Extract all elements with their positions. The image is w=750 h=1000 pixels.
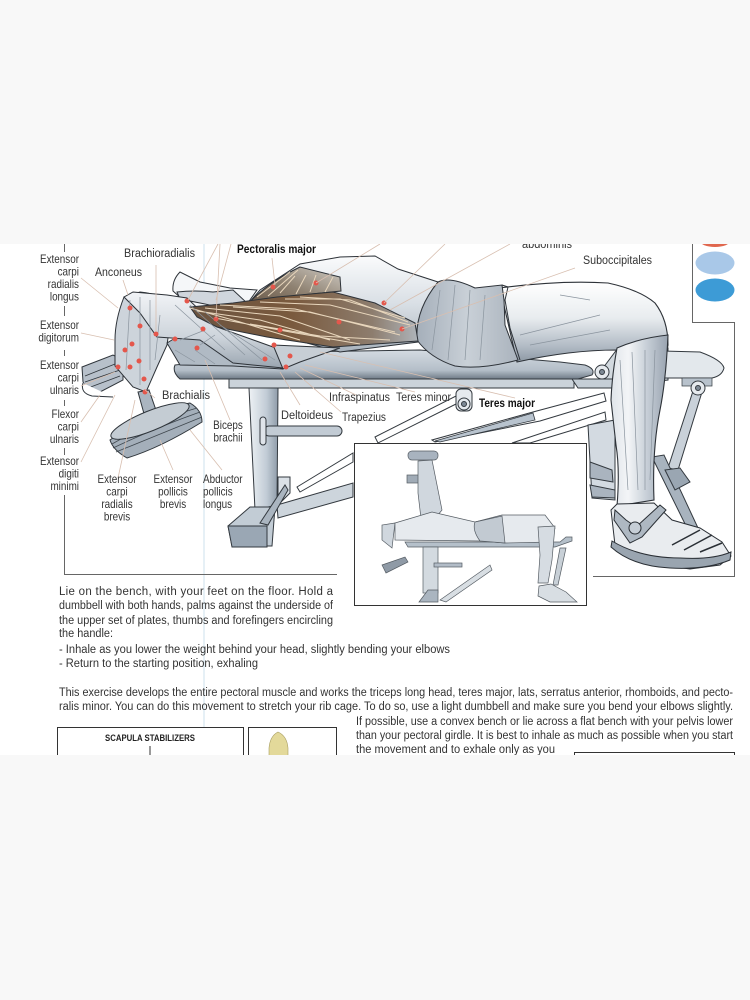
top page margin overlay (0, 0, 750, 244)
lower arm (167, 332, 283, 369)
label: extensor digitorum: digitorum (38, 332, 79, 345)
description text: than your pectoral girdle. It is best to inhale as much as possible when you start (356, 730, 734, 742)
muscle labels left column (38, 253, 79, 493)
label: abductor pollicis longus: Abductor (203, 473, 243, 486)
muscle labels around the figure (95, 239, 652, 524)
shoulder and armpit (273, 345, 340, 369)
bench and frame (174, 348, 724, 547)
calf (611, 335, 668, 506)
label: teres major: Teres major (479, 398, 535, 410)
upper plate lip (82, 383, 113, 397)
instructions text (59, 586, 450, 670)
bench under rail (229, 379, 574, 388)
pale blue fold line (203, 244, 205, 740)
label: extensor digiti minimi: digiti (59, 468, 79, 481)
description text: If possible, use a convex bench or lie across a flat bench with your pelvis lower (356, 716, 733, 728)
label: extensor carpi radialis longus: carpi (58, 266, 79, 279)
inset panel: stretched arms view (354, 444, 586, 606)
instructions text: Lie on the bench, with your feet on the floor. Hold a (59, 586, 334, 598)
muscle fibre lines (190, 270, 410, 344)
label: extensor carpi radialis brevis: brevis (104, 511, 130, 524)
pectoralis, body and arms (115, 256, 520, 392)
right foot bar (278, 477, 290, 505)
label: abductor pollicis longus: pollicis (203, 486, 233, 499)
white scanned page band (0, 244, 750, 755)
muscle hatching on arms and legs (126, 285, 655, 490)
label: extensor carpi radialis brevis: Extensor (97, 473, 137, 486)
inset body (395, 512, 577, 602)
illustration frame lines (64, 244, 734, 576)
handle (138, 390, 158, 421)
label: deltoideus: Deltoideus (281, 410, 333, 422)
label: infraspinatus: Infraspinatus (329, 392, 390, 404)
instructions text: the upper set of plates, thumbs and forefingers encircling (59, 615, 333, 627)
seat lever (260, 417, 342, 445)
thigh (500, 282, 668, 362)
label: extensor carpi radialis longus: Extensor (40, 253, 79, 266)
label: trapezius: Trapezius (342, 412, 386, 424)
anatomical leader lines (81, 244, 575, 478)
panel: scapula stabilizers: SCAPULA STABILIZERS (105, 733, 195, 743)
description text: ralis minor. You can do this movement to stretch your rib cage. To do so, use a light dumbbell and make sure you bend your elbows slightly. (59, 701, 733, 713)
panel: lower right box (574, 752, 734, 772)
panel: scapula stabilizers (58, 728, 244, 768)
torso and chest (240, 256, 438, 352)
label: extensor carpi ulnaris: ulnaris (50, 384, 79, 397)
inset bench (405, 537, 572, 602)
hanging forearms (115, 292, 172, 392)
lower plates (107, 396, 202, 458)
front sandal (611, 503, 731, 569)
label: extensor digiti minimi: minimi (50, 480, 79, 493)
upper pectoral fan (240, 267, 341, 313)
label: flexor carpi ulnaris: Flexor (52, 408, 79, 421)
waistband and seam (502, 285, 520, 360)
label: extensor carpi radialis brevis: radialis (101, 498, 133, 511)
description text (59, 687, 734, 756)
label: pectoralis major: Pectoralis major (237, 244, 316, 256)
bench right support (600, 348, 724, 534)
bench post (249, 388, 278, 510)
label: extensor pollicis brevis: pollicis (158, 486, 188, 499)
label: anconeus: Anconeus (95, 267, 142, 279)
pivot knobs (456, 365, 705, 411)
panel: scapula muscle illustration (248, 728, 336, 768)
head (177, 290, 247, 312)
instructions text: dumbbell with both hands, palms against the underside of (59, 600, 334, 612)
label: brachialis: Brachialis (162, 390, 210, 402)
upper arm (124, 292, 290, 368)
description text: the movement and to exhale only as you (356, 744, 555, 756)
bottom page margin overlay (0, 755, 750, 1000)
head rest pad (173, 272, 257, 314)
dumbbell (82, 355, 202, 458)
label: extensor carpi radialis brevis: carpi (106, 486, 128, 499)
instructions text: the handle: (59, 628, 113, 640)
instructions text: - Inhale as you lower the weight behind your head, slightly bending your elbows (59, 644, 450, 656)
rear leg and sandal (588, 420, 615, 500)
legend colour swatches (696, 235, 734, 302)
inset arms and dumbbell (382, 451, 442, 573)
label: extensor carpi radialis longus: radialis (48, 278, 79, 291)
label: suboccipitales: Suboccipitales (583, 255, 652, 267)
label: biceps brachii: Biceps (213, 419, 243, 432)
label: extensor pollicis brevis: brevis (160, 498, 186, 511)
label: extensor digiti minimi: Extensor (40, 455, 79, 468)
lower pectoral fibres (190, 292, 418, 347)
label: flexor carpi ulnaris: carpi (58, 421, 79, 434)
label: biceps brachii: brachii (213, 432, 243, 445)
label: flexor carpi ulnaris: ulnaris (50, 433, 79, 446)
bench foot (228, 507, 275, 546)
bench main pad (174, 350, 593, 379)
label: extensor pollicis brevis: Extensor (153, 473, 193, 486)
upper plates (82, 355, 123, 392)
label: abductor pollicis longus: longus (203, 498, 232, 511)
label: abdominis: abdominis (522, 239, 572, 251)
bench rear frame struts (277, 393, 606, 518)
label: extensor carpi ulnaris: Extensor (40, 359, 79, 372)
label: brachioradialis: Brachioradialis (124, 248, 195, 260)
instructions text: - Return to the starting position, exhaling (59, 658, 258, 670)
red muscle markers (116, 280, 404, 394)
shorts (417, 280, 518, 367)
label: extensor digitorum: Extensor (40, 319, 79, 332)
front leg (500, 282, 668, 506)
label: extensor carpi ulnaris: carpi (58, 372, 79, 385)
label: teres minor: Teres minor (396, 392, 451, 404)
label: extensor carpi radialis longus: longus (50, 291, 79, 304)
